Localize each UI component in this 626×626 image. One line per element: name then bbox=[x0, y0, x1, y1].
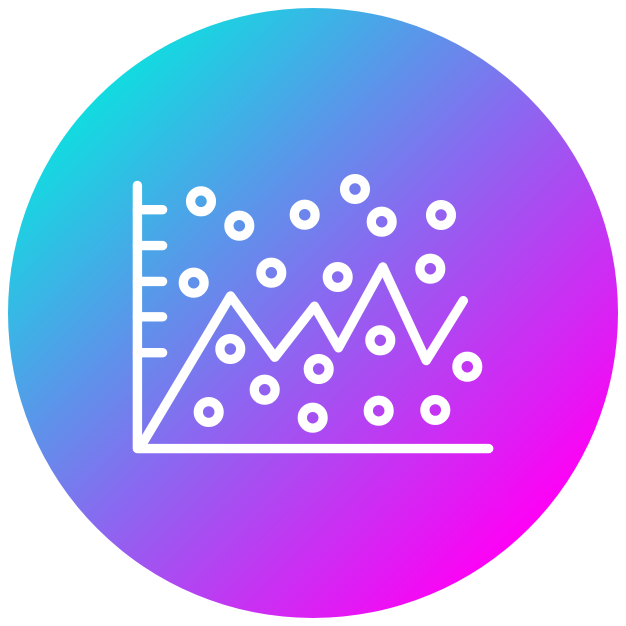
scatter points bbox=[183, 179, 478, 428]
line series bbox=[141, 267, 463, 446]
chart axes bbox=[137, 186, 489, 449]
